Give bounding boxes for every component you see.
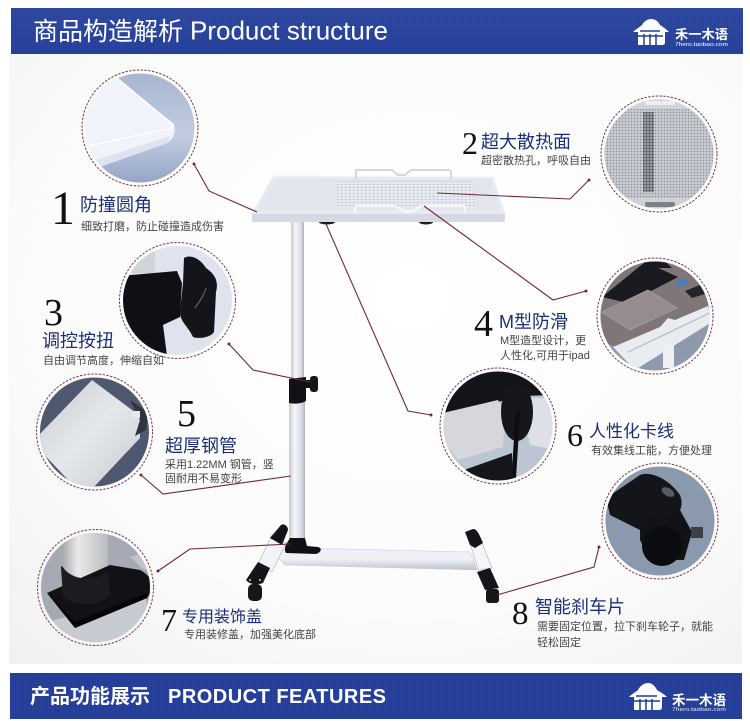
- title 1: 防撞圆角: [80, 195, 152, 215]
- product: laptop table: [246, 170, 505, 603]
- callout 4: m-shaped anti-slip: [474, 303, 590, 362]
- title 3: 调控按扭: [42, 331, 114, 351]
- description 1: 细致打磨，防止碰撞造成伤害: [81, 219, 224, 233]
- number 5: 5: [177, 393, 196, 435]
- height clamp and knob: [289, 376, 318, 404]
- title 7: 专用装饰盖: [182, 608, 262, 626]
- number 8: 8: [512, 596, 528, 632]
- leader lines: [140, 162, 600, 595]
- callout 6: cable management: [567, 417, 712, 457]
- detail circle 4: m-shaped anti-slip lip: [597, 258, 715, 374]
- logo: top brand mark: [633, 19, 728, 48]
- leader line 1: [192, 162, 257, 212]
- description 5: 固耐用不易变形: [165, 471, 242, 485]
- leader line 7: [156, 544, 290, 572]
- logo: top brand mark: 7hero.taobao.com: [675, 42, 728, 48]
- detail circle 1: rounded corner: [80, 70, 200, 190]
- description 7: 专用装修盖，加强美化底部: [184, 627, 316, 641]
- heading: english product features: PRODUCT FEATURES: [168, 686, 386, 708]
- callout 1: anti-collision corner: [51, 182, 224, 235]
- detail circle 5: thick steel tube: [36, 374, 154, 492]
- callout 5: thick steel tube: [165, 393, 274, 485]
- callout 7: decorative cover: [161, 602, 316, 641]
- number 7: 7: [161, 602, 177, 638]
- heading: product features: 产品功能展示: [30, 685, 150, 708]
- title 2: 超大散热面: [481, 132, 571, 152]
- description 8: [537, 619, 713, 649]
- description 8: 轻松固定: [537, 635, 581, 649]
- detail circle 8: brake caster: [602, 463, 720, 581]
- leader line 8: [497, 546, 600, 595]
- description 5: [165, 457, 274, 485]
- description 4: M型造型设计，更: [500, 333, 586, 347]
- pole lower section: [289, 402, 305, 542]
- table top: [252, 170, 505, 222]
- description 8: 需要固定位置，拉下刹车轮子，就能: [537, 619, 713, 633]
- number 6: 6: [567, 417, 583, 453]
- number 4: 4: [474, 303, 493, 345]
- heading: product structure: [33, 16, 388, 46]
- title 4: M型防滑: [499, 312, 568, 332]
- number 3: 3: [44, 292, 63, 334]
- callout 3: adjustment knob: [42, 292, 164, 367]
- description 4: 人性化,可用于ipad: [500, 348, 590, 362]
- detail circle 3: adjustment knob: [118, 242, 237, 359]
- heading: product structure: 商品构造解析: [33, 18, 183, 46]
- leader line 3: [228, 342, 310, 382]
- logo: bottom brand mark: [629, 683, 726, 713]
- detail circle 6: cable clip: [440, 368, 558, 490]
- pole upper section: [291, 222, 304, 379]
- detail circle 7: decorative base cover: [37, 529, 155, 647]
- description 6: 有效集线工能，方便处理: [591, 443, 712, 457]
- callout 8: smart brake: [512, 596, 713, 649]
- leader line 4: [424, 206, 588, 300]
- logo: bottom brand mark: 禾一木语: [672, 692, 726, 708]
- leader line 2: [437, 178, 590, 199]
- top header banner: [11, 8, 743, 54]
- logo: top brand mark: 禾一木语: [675, 27, 728, 42]
- bottom banner: product features: [10, 673, 742, 719]
- title 6: 人性化卡线: [589, 422, 674, 441]
- description 3: 自由调节高度，伸缩自如: [43, 353, 164, 367]
- table base frame: [246, 524, 499, 603]
- number 1: 1: [51, 182, 75, 235]
- leader line 5: [140, 474, 291, 494]
- description 2: 超密散热孔，呼吸自由: [481, 153, 591, 167]
- table feet under top: [319, 220, 335, 224]
- detail circle 2: heat dissipation surface: [600, 96, 720, 214]
- title 5: 超厚钢管: [165, 436, 237, 456]
- base cover plate: [285, 538, 321, 554]
- logo: bottom brand mark: 7hero.taobao.com: [672, 707, 726, 713]
- number 2: 2: [462, 125, 478, 161]
- description 5: 采用1.22MM 钢管，竖: [165, 457, 274, 471]
- leader line 6: [326, 224, 432, 416]
- heading: product structure: Product structure: [190, 16, 388, 46]
- callout 2: heat dissipation: [462, 125, 591, 167]
- description 4: [500, 333, 590, 362]
- title 8: 智能刹车片: [535, 597, 625, 617]
